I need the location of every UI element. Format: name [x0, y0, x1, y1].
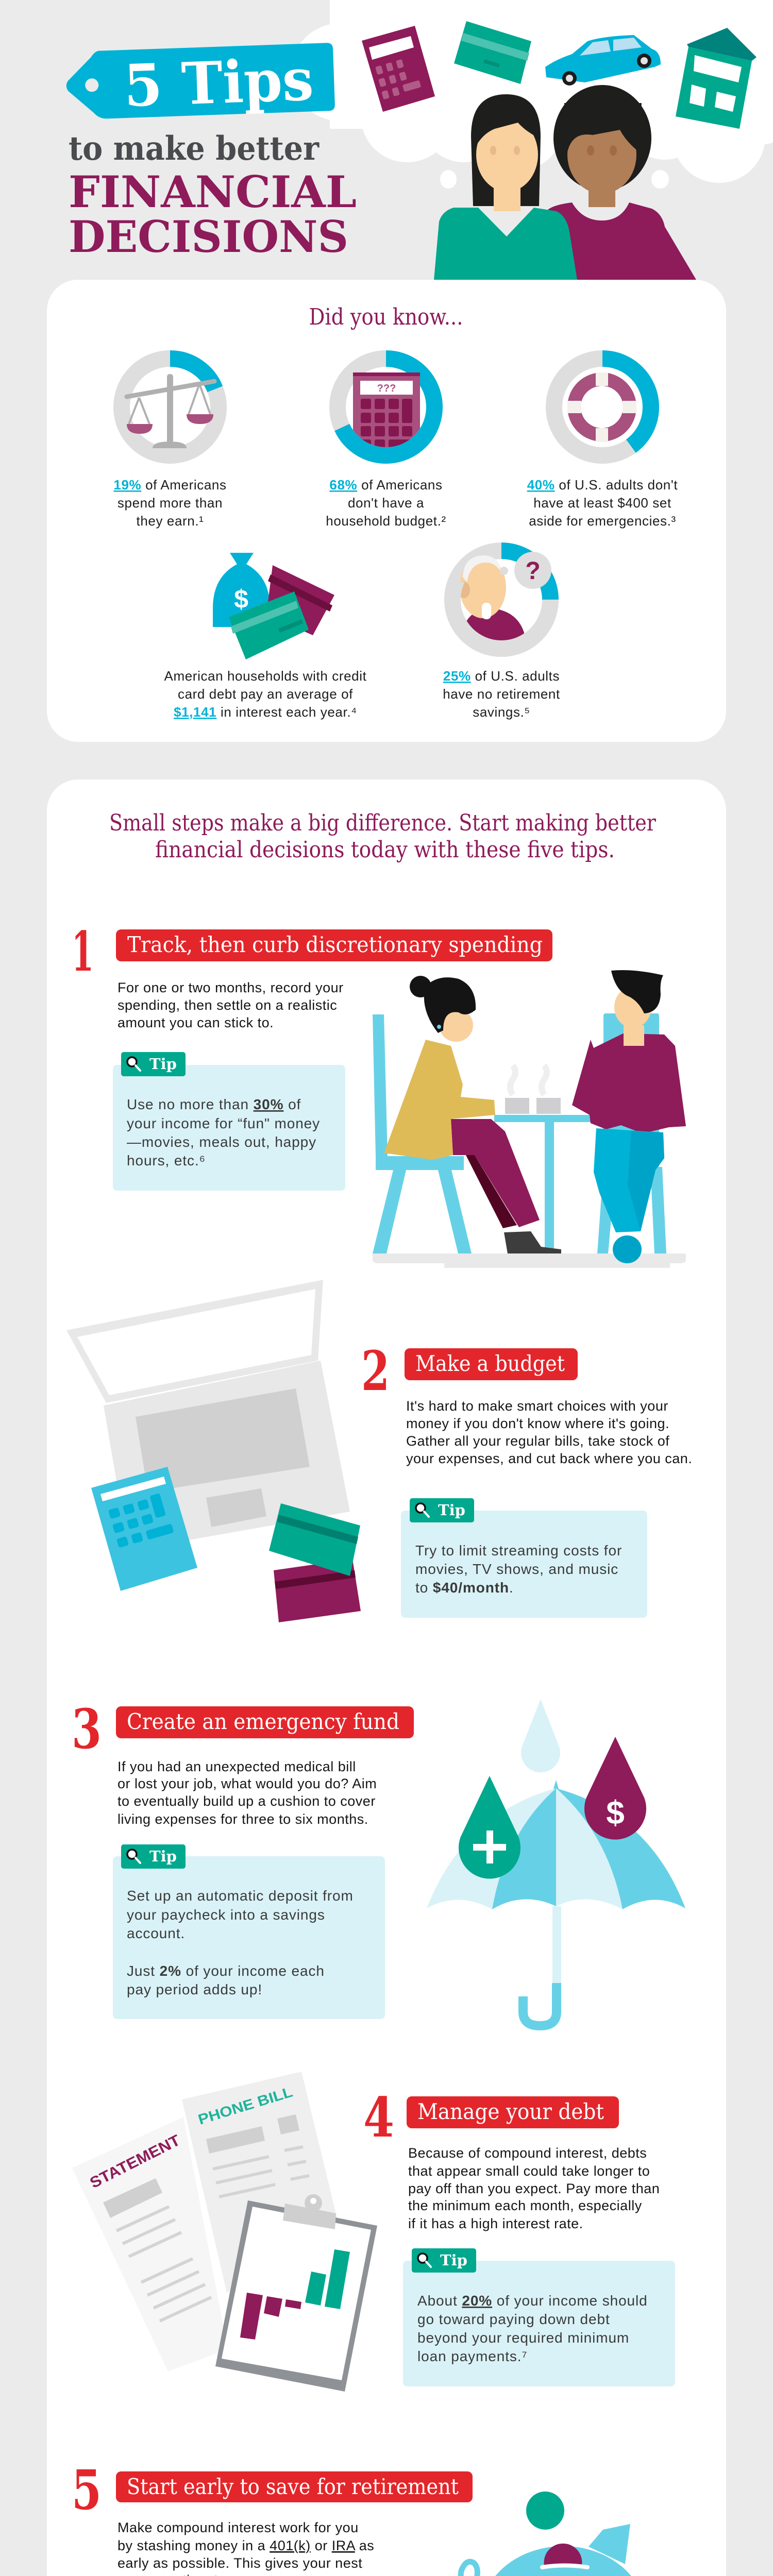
- illustration: piggy bank: [442, 2492, 663, 2576]
- stat 1 text: spend more than: [117, 495, 223, 511]
- tip 2 body text: your expenses, and cut back where you can.: [406, 1451, 692, 1466]
- tip 2 tip box: [401, 1498, 647, 1618]
- tip 2 body text: It's hard to make smart choices with your: [406, 1398, 668, 1414]
- tip 4 body text: [408, 2145, 660, 2231]
- tip 1 banner: Track, then curb discretionary spending: [127, 932, 543, 957]
- tip 3 tip box: Tip: [149, 1848, 177, 1865]
- stat 3 text: aside for emergencies.³: [529, 513, 676, 529]
- illustration: woman in green: [434, 94, 577, 280]
- tip 1 tip box: —movies, meals out, happy: [127, 1134, 316, 1150]
- heading: Did you know: Did you know...: [309, 304, 463, 330]
- stat 5 text: 25% of U.S. adults: [443, 668, 560, 684]
- tip 4 body text: the minimum each month, especially: [408, 2198, 642, 2213]
- tip 3 body text: to eventually build up a cushion to cover: [117, 1793, 376, 1809]
- tip 1 tip box: hours, etc.⁶: [127, 1153, 206, 1168]
- tip 4 tip box: beyond your required minimum: [417, 2330, 629, 2346]
- stat 1 text: 19% of Americans: [113, 477, 227, 493]
- tip 2 body text: Gather all your regular bills, take stock of: [406, 1433, 669, 1449]
- tip 3 tip box: Just 2% of your income each: [127, 1963, 325, 1979]
- stat 2: donut 68% with calculator: [338, 359, 434, 455]
- stat 2 text: don't have a: [348, 495, 424, 511]
- tip 2 tip box: movies, TV shows, and music: [415, 1561, 618, 1577]
- stat 2 text: 68% of Americans: [329, 477, 443, 493]
- tip 2 tip box: to $40/month.: [415, 1580, 514, 1596]
- tip 4 number: 4: [363, 2085, 394, 2149]
- heading: small steps: Small steps make a big difference. Start making better: [109, 810, 657, 836]
- tip 3 banner: Create an emergency fund: [127, 1709, 399, 1734]
- stat 4 text: [164, 668, 367, 720]
- tip 3 body text: [117, 1759, 377, 1827]
- illustration: woman in magenta: [546, 85, 696, 280]
- tip 2 number: 2: [361, 1338, 390, 1403]
- tip 3 tip box: your paycheck into a savings: [127, 1907, 325, 1923]
- stat 5 text: have no retirement: [443, 686, 560, 702]
- tip 5 body text: Make compound interest work for you: [117, 2520, 359, 2535]
- stat 3 text: [527, 477, 678, 529]
- stat 5: donut 25% with retiree: ?: [525, 557, 541, 585]
- panel: five tips: [47, 779, 726, 2576]
- title tag: 5 Tips: [65, 43, 335, 122]
- tip 1 body text: For one or two months, record your: [117, 980, 344, 995]
- stat 2 text: [326, 477, 446, 529]
- tip 4 tip box: [403, 2248, 675, 2386]
- tip 3 body text: If you had an unexpected medical bill: [117, 1759, 356, 1774]
- heading: small steps: financial decisions today with these five tips.: [155, 837, 615, 863]
- tip 4 body text: Because of compound interest, debts: [408, 2145, 647, 2161]
- heading: small steps: [109, 810, 657, 863]
- tip 1 body text: amount you can stick to.: [117, 1015, 274, 1030]
- tip 4 body text: that appear small could take longer to: [408, 2163, 650, 2179]
- tip 3 tip box: [113, 1844, 385, 2019]
- tip 1 tip box: Tip: [149, 1055, 177, 1073]
- tip 1 tip box: [113, 1052, 345, 1191]
- tip 5 banner: Start early to save for retirement: [127, 2474, 459, 2499]
- tip 4 tip box: go toward paying down debt: [417, 2311, 610, 2327]
- panel: did you know: [47, 280, 726, 742]
- tip 4 tip box: About 20% of your income should: [417, 2293, 648, 2309]
- tip 4 body text: pay off than you expect. Pay more than: [408, 2181, 660, 2196]
- tip 2 banner: Make a budget: [415, 1351, 565, 1376]
- illustration: cafe couple: [373, 970, 686, 1268]
- tip 1 body text: spending, then settle on a realistic: [117, 997, 337, 1013]
- tip 1 tip box: your income for “fun" money: [127, 1115, 320, 1131]
- title: FINANCIAL DECISIONS: DECISIONS: [69, 211, 348, 262]
- tip 3 body text: living expenses for three to six months.: [117, 1811, 368, 1827]
- stat 2 text: household budget.²: [326, 513, 446, 529]
- illustration: umbrella with drops: $: [606, 1794, 625, 1831]
- stat 3 text: 40% of U.S. adults don't: [527, 477, 678, 493]
- illustration: bills and clipboard: STATEMENT: [87, 2132, 183, 2192]
- stat 5 text: savings.⁵: [473, 704, 530, 720]
- tip 2 tip box: Tip: [438, 1501, 465, 1519]
- tip 3 number: 3: [72, 1697, 102, 1761]
- tip 5 body text: [117, 2520, 374, 2576]
- stat 4: money bag and credit cards: $: [234, 585, 248, 614]
- stat 5 text: [443, 668, 560, 720]
- stat 1 text: they earn.¹: [137, 513, 204, 529]
- title: to make better: to make better: [69, 129, 320, 168]
- icon: house: [676, 28, 757, 129]
- illustration: laptop, calculator and cards: [66, 1280, 361, 1622]
- stat 1: donut 19% with scale: [122, 359, 219, 455]
- tip 1 tip box: Use no more than 30% of: [127, 1096, 301, 1112]
- stat 4: money bag and credit cards: [213, 553, 334, 659]
- tip 1 body text: [117, 980, 344, 1030]
- stat 3: donut 40% with life buoy: [554, 359, 651, 455]
- stat 3 text: have at least $400 set: [533, 495, 671, 511]
- tip 5 number: 5: [72, 2458, 102, 2522]
- stat 2: donut 68% with calculator: ???: [377, 383, 396, 394]
- thought cloud: [291, 0, 773, 189]
- icon: calculator: [362, 26, 435, 112]
- tip 5 body text: by stashing money in a 401(k) or IRA as: [117, 2538, 374, 2553]
- tip 1 number: 1: [72, 919, 94, 984]
- stat 4 text: $1,141 in interest each year.⁴: [174, 704, 357, 720]
- illustration: umbrella with drops: [427, 1699, 685, 2026]
- tip 2 tip box: Try to limit streaming costs for: [415, 1543, 622, 1558]
- tip 3 tip box: pay period adds up!: [127, 1981, 262, 1997]
- title: FINANCIAL DECISIONS: FINANCIAL: [69, 166, 357, 217]
- stat 5: donut 25% with retiree: [452, 551, 551, 649]
- tip 5 body text: early as possible. This gives your nest: [117, 2555, 362, 2571]
- tip 4 tip box: loan payments.⁷: [417, 2348, 528, 2364]
- icon: car: [545, 35, 661, 86]
- illustration: bills and clipboard: PHONE BILL: [196, 2084, 294, 2128]
- tip 3 body text: or lost your job, what would you do? Aim: [117, 1776, 377, 1791]
- tip 3 tip box: Set up an automatic deposit from: [127, 1888, 354, 1904]
- illustration: bills and clipboard: [72, 2072, 377, 2392]
- stat 4 text: card debt pay an average of: [178, 686, 353, 702]
- tip 4 banner: Manage your debt: [417, 2099, 604, 2124]
- stat 1 text: [113, 477, 227, 529]
- title tag: 5 Tips: 5 Tips: [123, 46, 314, 120]
- tip 2 body text: money if you don't know where it's going.: [406, 1416, 669, 1431]
- tip 3 tip box: account.: [127, 1925, 185, 1941]
- icon: credit card: [454, 21, 531, 84]
- tip 4 body text: if it has a high interest rate.: [408, 2216, 583, 2231]
- tip 4 tip box: Tip: [440, 2251, 467, 2269]
- stat 4 text: American households with credit: [164, 668, 367, 684]
- title: FINANCIAL DECISIONS: [69, 166, 357, 262]
- tip 2 body text: [406, 1398, 692, 1466]
